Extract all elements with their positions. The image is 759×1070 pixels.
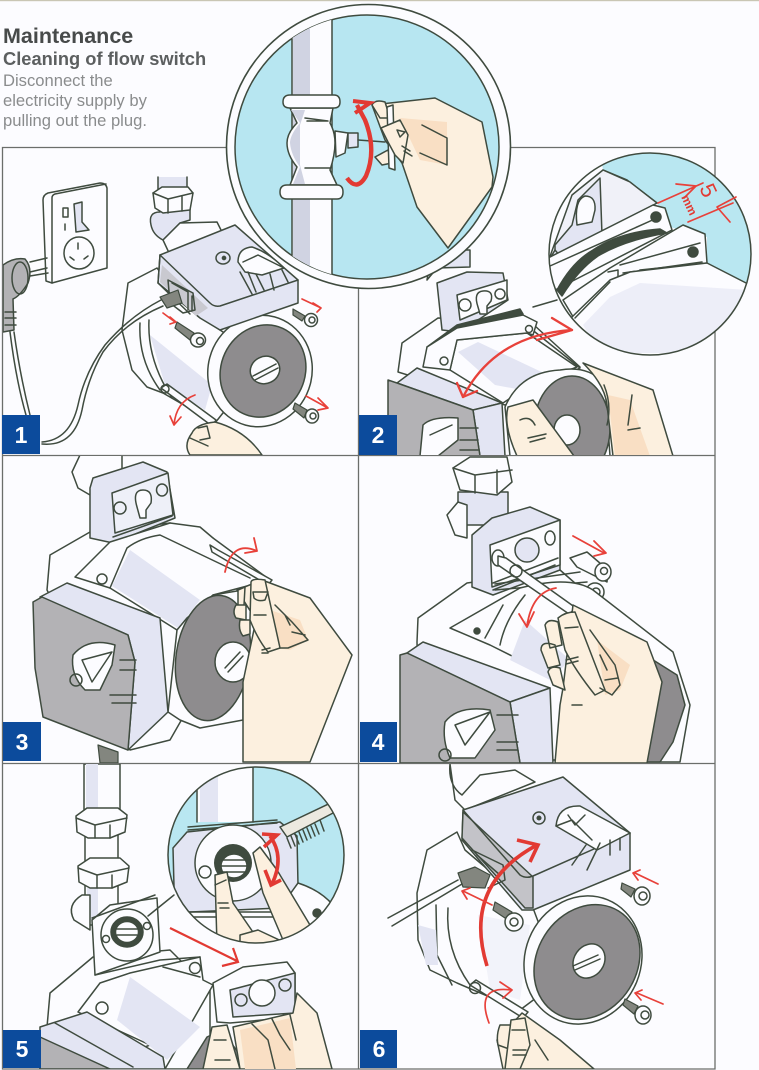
screws — [470, 883, 651, 1024]
red arrows — [519, 536, 606, 627]
rubber seal — [557, 229, 667, 296]
disc — [505, 878, 661, 1042]
icon: plug and cable — [3, 258, 48, 415]
control box — [388, 368, 505, 456]
red arrows — [163, 299, 328, 425]
dimension: 5 mm — [658, 180, 736, 222]
step badge 5 — [3, 1030, 41, 1068]
cylinder and disc edge — [450, 582, 690, 762]
cylinder and flange — [75, 523, 270, 630]
panel 2: open pump — [388, 250, 673, 480]
red arrow — [457, 318, 572, 397]
main magnifier: flow switch on pipe — [226, 4, 510, 290]
title: Maintenance — [3, 24, 133, 48]
motor plate — [423, 272, 537, 370]
step badge 3 — [3, 722, 41, 761]
pipe, nut and elbow — [150, 177, 222, 255]
step badge 4 — [360, 722, 397, 762]
body — [560, 263, 759, 370]
neck — [427, 250, 470, 280]
pipe — [292, 10, 332, 290]
red arrow — [225, 538, 257, 572]
step badge 6 — [360, 1030, 397, 1068]
panel 3: remove screw — [33, 455, 352, 763]
disc — [168, 590, 258, 728]
screwdriver — [498, 556, 576, 614]
pump shell — [398, 318, 580, 405]
inset: 5 mm gap magnifier — [548, 150, 759, 370]
red arrows — [462, 840, 663, 1023]
control box — [40, 1012, 165, 1069]
hand — [497, 1013, 594, 1069]
instruction text: Disconnect the — [3, 71, 113, 90]
cylinder — [450, 300, 580, 403]
housing — [548, 170, 657, 262]
panel 1: unplug and loosen screws — [3, 177, 328, 455]
plug and cable — [388, 867, 490, 926]
pipe and nuts — [71, 764, 129, 930]
switch plate — [92, 895, 174, 975]
inset: cleaning the flow switch — [150, 764, 358, 950]
step badge 4: 4 — [372, 729, 385, 755]
dimension: 5 mm: 5 — [694, 180, 722, 201]
instruction text: electricity supply by — [3, 91, 148, 110]
screwdriver — [210, 545, 272, 585]
hand — [234, 579, 352, 762]
panel 6: reassemble — [388, 764, 663, 1069]
hands — [187, 993, 332, 1069]
removed switch housing — [213, 962, 295, 1023]
pump body — [121, 267, 313, 428]
hand — [541, 605, 662, 763]
dimension: 5 mm: mm — [678, 192, 700, 218]
step badge 1: 1 — [15, 422, 28, 448]
pipe and nut — [447, 457, 512, 538]
hand — [187, 422, 262, 455]
disc and hand — [504, 362, 674, 455]
valve body — [287, 108, 337, 185]
step badge 2 — [359, 415, 397, 455]
step badge 6: 6 — [373, 1036, 385, 1062]
red arrow — [347, 105, 371, 185]
panel 5: clean flow switch — [40, 764, 332, 1069]
icon: wall socket — [43, 183, 107, 283]
instruction text: pulling out the plug. — [3, 111, 147, 130]
cylinder and flange — [78, 957, 213, 1069]
subtitle: Cleaning of flow switch — [3, 48, 206, 69]
instruction text — [3, 71, 148, 130]
screws removed — [495, 552, 611, 601]
control box — [400, 642, 553, 763]
cover edge — [548, 205, 672, 290]
screws — [161, 309, 318, 426]
shell — [417, 832, 560, 1010]
motor plate — [90, 462, 175, 543]
control box — [462, 777, 630, 910]
lower plate — [563, 225, 707, 320]
control box — [33, 583, 168, 750]
red arrow — [170, 928, 238, 966]
step badge 5: 5 — [16, 1036, 29, 1062]
step badge 1 — [2, 415, 40, 454]
hand — [372, 98, 493, 248]
step badge 3: 3 — [16, 729, 28, 755]
pump shell — [47, 950, 210, 1069]
panel 4: remove remaining screw — [400, 457, 690, 763]
switch stem — [335, 131, 348, 157]
step badge 2: 2 — [372, 422, 384, 448]
motor plate — [472, 507, 560, 595]
control box — [42, 225, 298, 444]
